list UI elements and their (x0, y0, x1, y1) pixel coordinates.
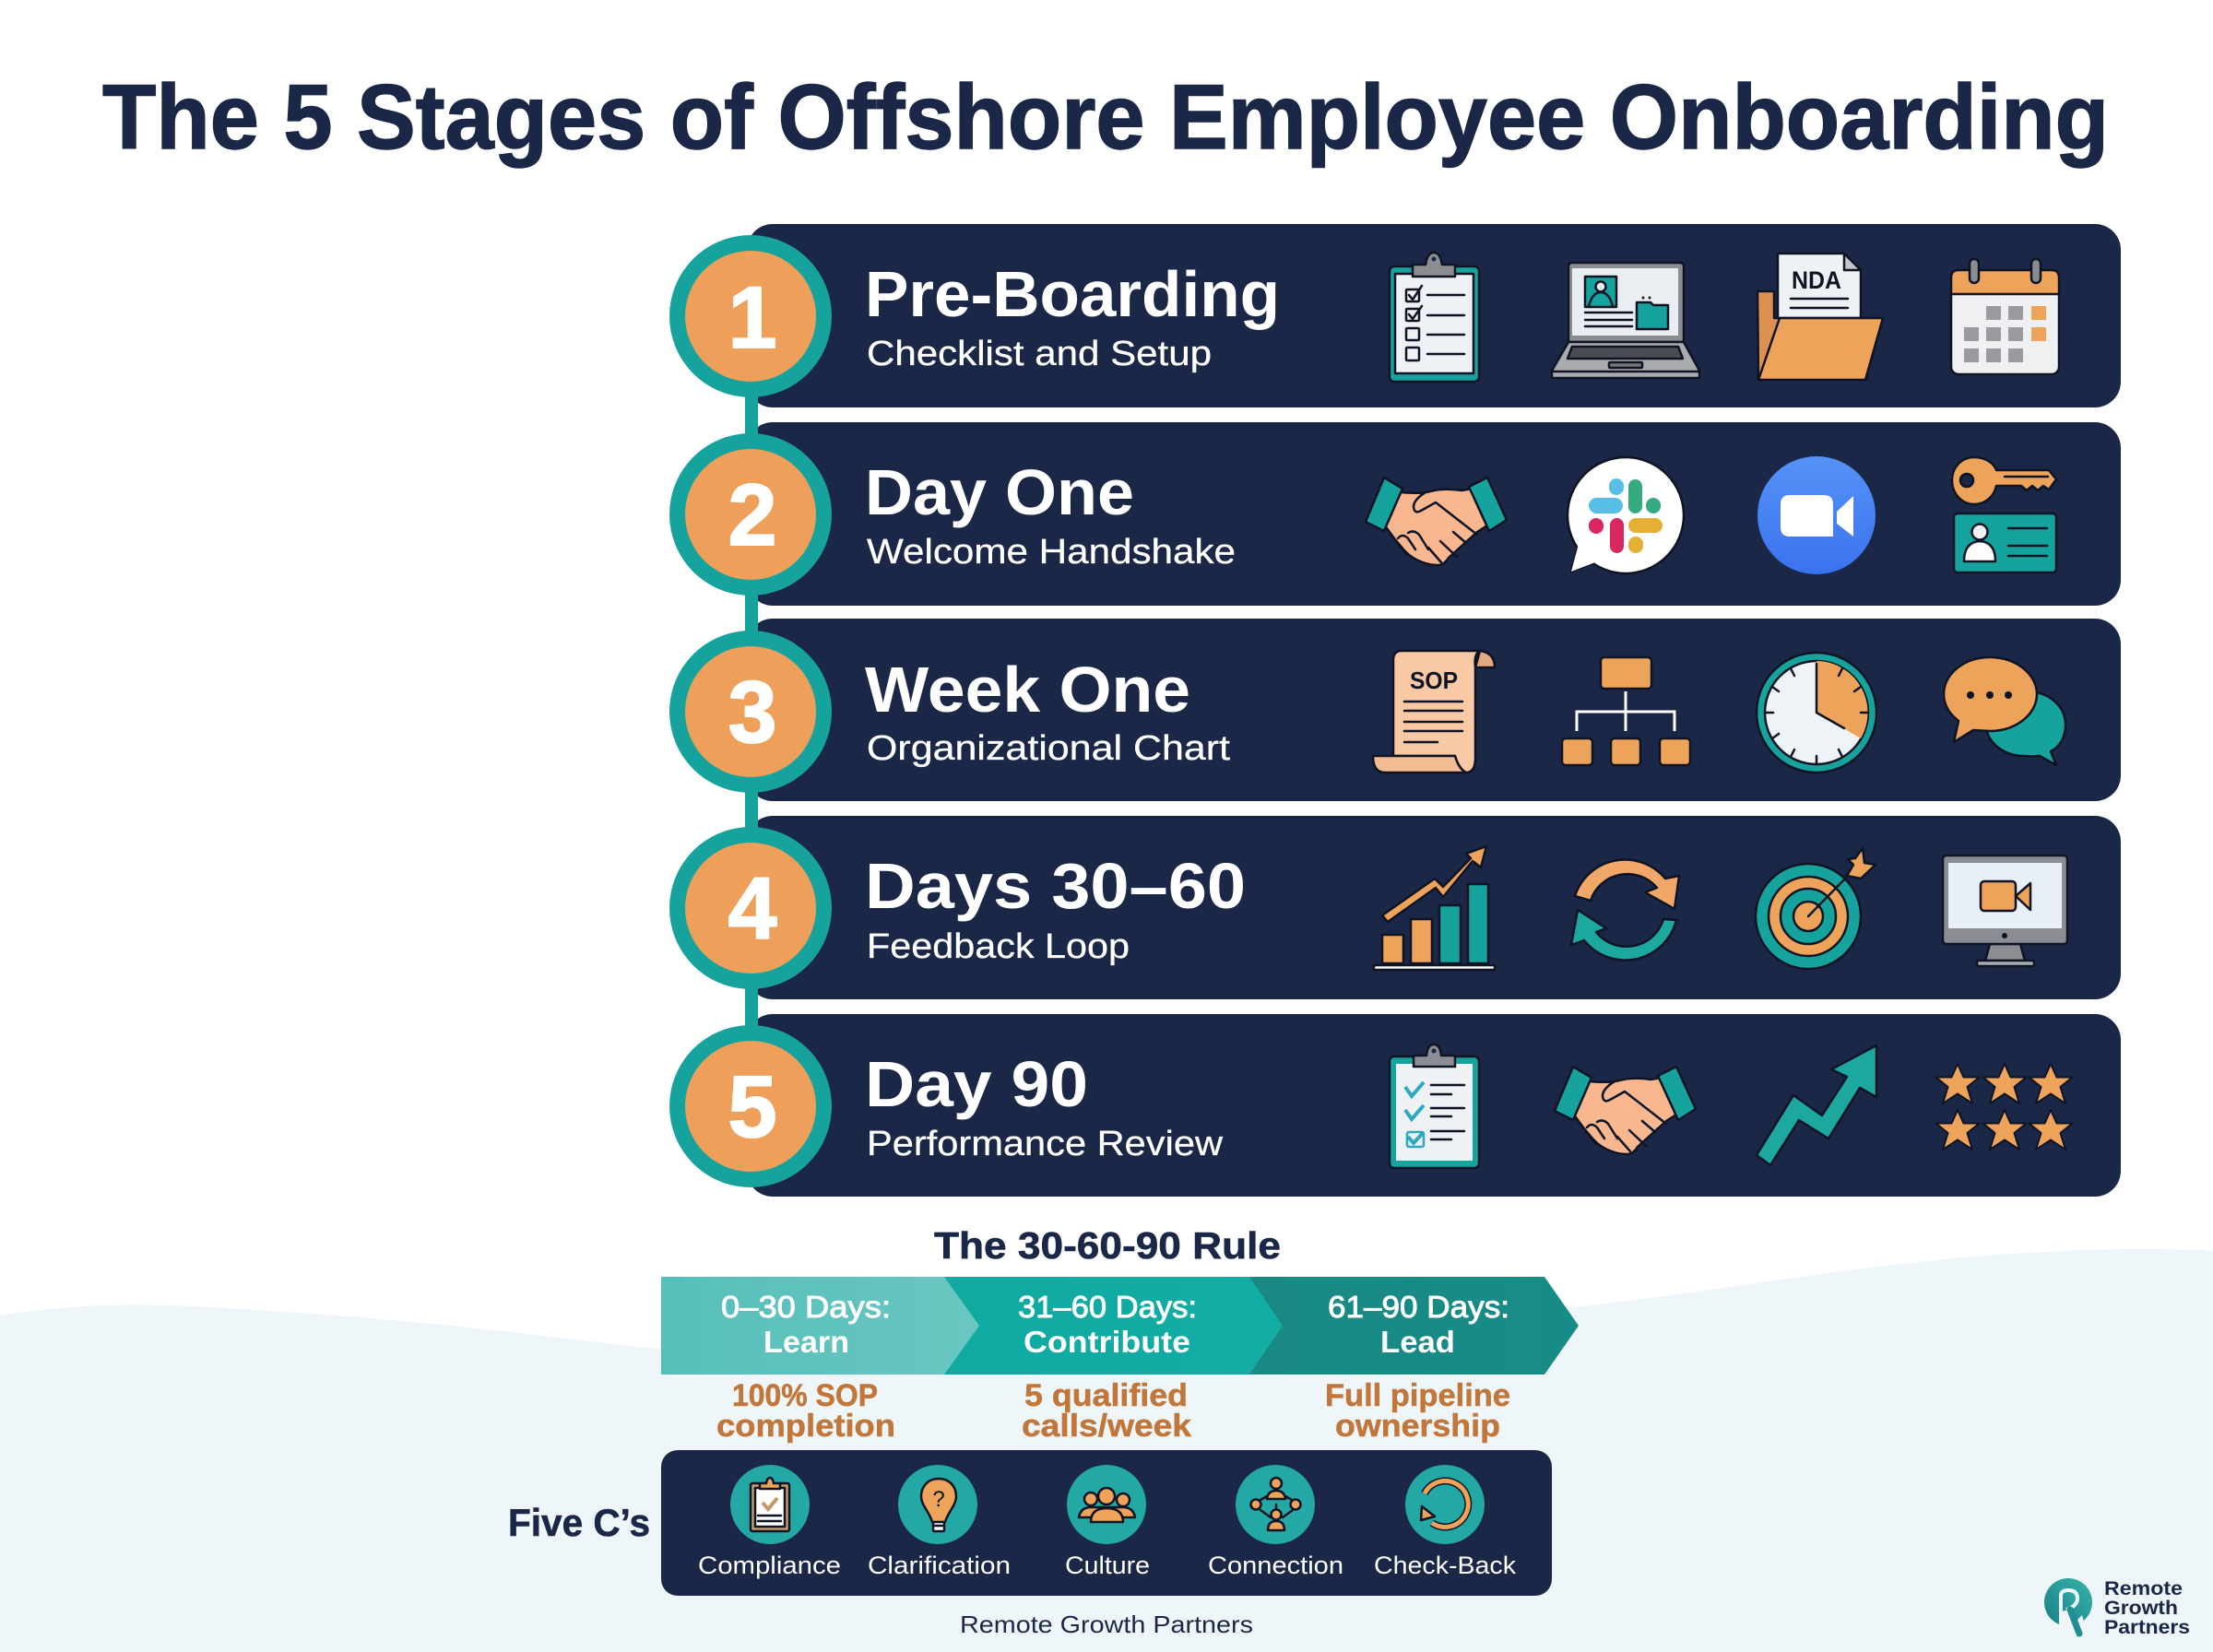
logo: Remote Growth Partners: Remote (2104, 1578, 2183, 1599)
item: Check-Back (1374, 1465, 1517, 1579)
icon: laptop (1552, 263, 1699, 378)
milestone: full pipeline ownership: Full pipeline (1325, 1378, 1510, 1413)
chevron: 31-60 days: Contribute (1024, 1325, 1190, 1359)
milestone: full pipeline ownership: ownership (1335, 1409, 1500, 1444)
icon: handshake (1366, 478, 1507, 565)
milestone: 100% SOP completion (716, 1378, 895, 1444)
icon: calendar (1951, 259, 2059, 374)
icon: Zoom video (1757, 456, 1876, 574)
stage 4 number badge (669, 827, 832, 989)
stage 2 heading: Day One (865, 456, 1134, 528)
stage 2 number badge: 2 (728, 466, 776, 564)
chevron: 61-90 days (1245, 1277, 1579, 1375)
stage 2 subheading: Welcome Handshake (867, 533, 1236, 572)
stage 4 subheading: Feedback Loop (867, 927, 1130, 966)
stage 5 number badge: 5 (728, 1058, 776, 1156)
icon: review clipboard (1390, 1044, 1479, 1168)
item: Check-Back: Check-Back (1374, 1552, 1517, 1579)
stage 3 number badge: 3 (728, 664, 776, 761)
item: Connection: Connection (1208, 1552, 1343, 1579)
NDA label: NDA (1792, 266, 1841, 294)
stage 1 number badge (669, 235, 832, 397)
item: Culture: Culture (1065, 1552, 1150, 1579)
item: Clarification: ? (932, 1487, 945, 1512)
icon: Slack bubble (1568, 457, 1684, 573)
chevron: 61-90 days: Lead (1380, 1325, 1455, 1359)
stage 3 subheading: Organizational Chart (867, 729, 1230, 768)
stage 4 heading: Days 30–60 (865, 850, 1246, 922)
milestone: 5 qualified calls per week: calls/week (1022, 1409, 1191, 1444)
panel: stage 2 Day One (669, 422, 2121, 606)
stage 1 heading: Pre-Boarding (865, 258, 1280, 330)
background wave (0, 1249, 2213, 1652)
milestone: 5 qualified calls per week (1022, 1378, 1191, 1444)
chevron: 0-30 days: 0–30 Days: (721, 1290, 891, 1324)
chevron timeline (661, 1277, 1579, 1375)
panel: stage 3 Week One (669, 619, 2121, 801)
icon: six rating stars (1936, 1064, 2073, 1150)
stage 4 number badge: 4 (728, 860, 777, 958)
chevron: 31-60 days (941, 1277, 1283, 1375)
panel: stage 4 Days 30-60 (669, 816, 2121, 999)
panel: Five C's (661, 1450, 1552, 1596)
item: Connection (1208, 1465, 1343, 1579)
stage 1 number badge: 1 (728, 269, 776, 367)
icon: clipboard checklist (1390, 253, 1479, 382)
stage 3 number badge (669, 631, 832, 793)
panel: stage 1 Pre-Boarding (669, 224, 2121, 407)
icon: org chart (1562, 657, 1690, 765)
icon: NDA folder (1757, 254, 1883, 380)
stage 1 subheading: Checklist and Setup (867, 335, 1212, 373)
icon: SOP scroll (1373, 651, 1495, 773)
panel: stage 5 Day 90 (669, 1014, 2121, 1197)
icon: monitor with video (1943, 856, 2067, 966)
milestone: 100% SOP completion: 100% SOP (732, 1378, 878, 1413)
logo: Remote Growth Partners (2044, 1578, 2190, 1638)
heading: 30-60-90 rule: The 30-60-90 Rule (934, 1224, 1281, 1267)
stage 5 subheading: Performance Review (867, 1125, 1224, 1163)
title: The 5 Stages of Offshore Employee Onboarding (102, 65, 2109, 168)
icon: handshake (1555, 1067, 1696, 1154)
logo: Remote Growth Partners: Growth (2104, 1598, 2178, 1619)
stage 5 number badge (669, 1025, 832, 1187)
icon: target with arrow (1756, 848, 1876, 969)
chevron: 31-60 days: 31–60 Days: (1018, 1290, 1197, 1324)
milestone: 100% SOP completion: completion (716, 1409, 895, 1444)
footer credit: Remote Growth Partners (960, 1611, 1253, 1638)
chevron: 0-30 days (661, 1277, 979, 1375)
label: Five C's: Five C’s (508, 1501, 650, 1544)
item: Compliance (698, 1465, 841, 1579)
SOP label: SOP (1410, 667, 1458, 694)
chevron: 0-30 days: Learn (763, 1325, 849, 1359)
logo: Remote Growth Partners: Partners (2104, 1617, 2190, 1638)
stage 2 number badge (669, 433, 832, 596)
icon: clock (1757, 653, 1876, 773)
icon: feedback loop arrows (1571, 860, 1679, 961)
icon: chat bubbles (1944, 657, 2065, 765)
milestone: 5 qualified calls per week: 5 qualified (1024, 1378, 1188, 1413)
item: Compliance: Compliance (698, 1552, 841, 1579)
stage 3 heading: Week One (865, 654, 1190, 726)
stage 5 heading: Day 90 (865, 1048, 1088, 1120)
item: Clarification: Clarification (868, 1552, 1011, 1579)
timeline connector between badges (745, 395, 758, 1031)
milestone: full pipeline ownership (1325, 1378, 1510, 1444)
item: Culture (1065, 1465, 1150, 1579)
chevron: 61-90 days: 61–90 Days: (1328, 1290, 1509, 1324)
icon: zigzag growth arrow (1757, 1045, 1876, 1165)
icon: key and ID card (1952, 457, 2056, 572)
item: Clarification (868, 1465, 1011, 1579)
icon: growth bar chart (1374, 846, 1495, 970)
